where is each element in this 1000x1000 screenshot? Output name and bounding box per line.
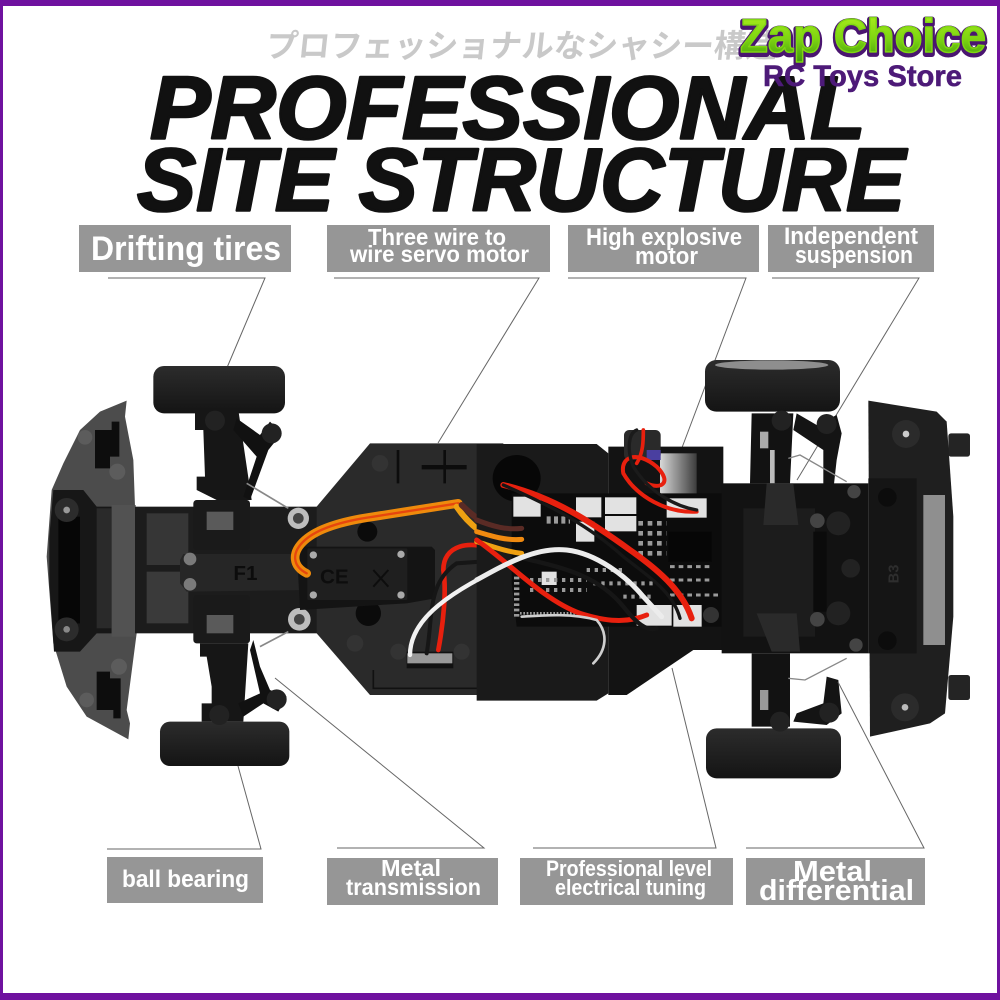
bottom callout: electrical tuning: electrical tuning <box>555 875 706 900</box>
main title: SITE STRUCTURE <box>137 131 908 230</box>
bottom callout: metal differential: Metal <box>793 856 872 888</box>
servo and battery wires <box>295 503 503 655</box>
bottom callout: metal transmission: Metal <box>381 855 441 881</box>
top callout: servo motor <box>327 224 550 443</box>
top callout: drifting tires: Drifting tires <box>91 230 281 268</box>
rear top wheel <box>705 360 840 412</box>
F1 arm <box>180 553 308 592</box>
top callout: independent suspension: suspension <box>795 242 913 269</box>
battery connector <box>390 644 470 668</box>
rear gearbox <box>722 483 868 653</box>
chassis left half: front bumper, front axle, servo <box>47 366 503 766</box>
rear bumper: B3 <box>886 565 902 583</box>
store logo: Zap Choice <box>740 9 986 62</box>
bottom callout: electrical tuning: Professional level <box>546 856 712 881</box>
rear bumper <box>868 401 970 737</box>
silver screws <box>288 508 311 631</box>
main title <box>137 60 908 230</box>
bottom callout: ball bearing: ball bearing <box>122 866 249 893</box>
top callout: explosive motor: motor <box>635 243 698 270</box>
rear suspension arms <box>750 411 847 732</box>
bottom callout: metal differential: differential <box>759 875 914 907</box>
top callout: independent suspension <box>768 223 934 480</box>
rear bottom wheel <box>706 728 841 778</box>
top callout: servo motor: wire servo motor <box>349 241 529 267</box>
front bumper <box>47 401 137 739</box>
centre battery tray <box>477 444 723 701</box>
chassis tray left <box>317 443 503 695</box>
board wires <box>477 430 697 663</box>
store logo <box>740 9 986 93</box>
servo motor: CE <box>320 565 349 588</box>
top callout: servo motor: Three wire to <box>368 224 506 250</box>
bottom callout: metal transmission: transmission <box>346 874 481 900</box>
top callout: explosive motor <box>568 224 759 453</box>
bottom callout: metal transmission <box>275 678 498 905</box>
front suspension arms <box>193 410 288 725</box>
chassis right half: PCB, motor, rear axle, rear bumper <box>477 360 970 778</box>
front bottom wheel <box>160 722 289 766</box>
main title: PROFESSIONAL <box>150 60 866 158</box>
store logo: Zap Choice <box>740 11 986 64</box>
F1 arm: F1 <box>233 562 257 585</box>
store logo: RC Toys Store <box>763 60 962 93</box>
front top wheel <box>153 366 285 413</box>
front spine <box>135 507 322 633</box>
japanese subtitle: プロフェッショナルなシャシー構造 <box>264 28 780 64</box>
top callout: explosive motor: High explosive <box>586 224 742 251</box>
circuit board <box>512 493 722 627</box>
motor <box>624 430 697 495</box>
servo motor <box>297 547 435 610</box>
bottom callout: electrical tuning <box>520 668 733 905</box>
top callout: drifting tires <box>79 225 291 370</box>
bottom callout: metal differential <box>746 682 925 907</box>
bottom callout: ball bearing <box>107 766 263 903</box>
top callout: independent suspension: Independent <box>784 223 918 250</box>
